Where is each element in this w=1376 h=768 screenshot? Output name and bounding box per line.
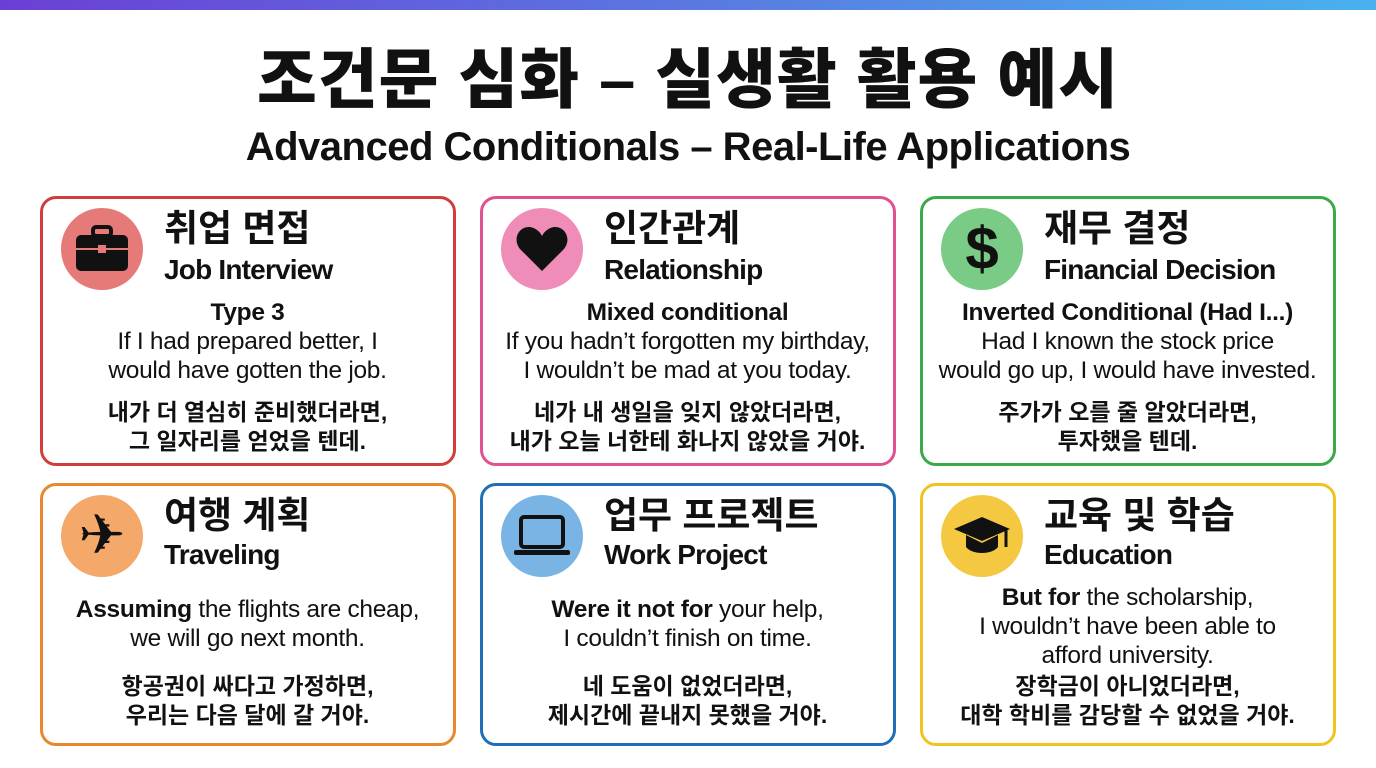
korean example: 네 도움이 없었더라면, [583, 673, 792, 699]
korean example: 네가 내 생일을 잊지 않았더라면, [534, 399, 841, 425]
english example [505, 299, 870, 384]
panel: traveling [40, 483, 456, 746]
english example: Were it not for your help, [551, 596, 824, 623]
english example [108, 299, 387, 384]
panel: education: Education [1044, 539, 1172, 570]
english example [979, 584, 1276, 669]
korean example: 장학금이 아니었더라면, [1015, 673, 1240, 699]
english example [76, 596, 419, 652]
icon: airplane [61, 495, 143, 577]
panel: financial decision: Financial Decision [1044, 254, 1275, 285]
korean example: 내가 더 열심히 준비했더라면, [108, 399, 387, 425]
korean example: 내가 오늘 너한테 화나지 않았을 거야. [510, 428, 865, 454]
icon: airplane: ✈ [79, 503, 125, 568]
english example: would go up, I would have invested. [939, 357, 1316, 384]
heading: 취업 면접 [164, 208, 310, 249]
korean example: 그 일자리를 얻었을 텐데. [129, 428, 366, 454]
icon: briefcase [61, 208, 143, 290]
panel: work project [480, 483, 896, 746]
heading: 업무 프로젝트 [604, 495, 819, 536]
english example [551, 596, 824, 652]
english example: Type 3 [210, 299, 284, 326]
korean example: 대학 학비를 감당할 수 없었을 거야. [960, 702, 1295, 728]
subtitle: Advanced Conditionals – Real-Life Applications [246, 125, 1130, 169]
english example: If you hadn’t forgotten my birthday, [505, 328, 870, 355]
icon: dollar [941, 208, 1023, 290]
english example: would have gotten the job. [108, 357, 387, 384]
english example: Had I known the stock price [981, 328, 1274, 355]
korean example: 제시간에 끝내지 못했을 거야. [548, 702, 827, 728]
korean example [548, 673, 827, 728]
panel: relationship [480, 196, 896, 466]
english example: Inverted Conditional (Had I...) [962, 299, 1293, 326]
english example: I couldn’t finish on time. [563, 625, 812, 652]
korean example: 항공권이 싸다고 가정하면, [122, 673, 373, 699]
panel: education [920, 483, 1336, 746]
english example: afford university. [1041, 642, 1214, 669]
icon: laptop [501, 495, 583, 577]
korean example [108, 399, 387, 454]
english example: we will go next month. [130, 625, 365, 652]
english example: I wouldn’t have been able to [979, 613, 1276, 640]
korean example [122, 673, 373, 728]
panel: traveling: Traveling [164, 539, 280, 570]
english example [938, 299, 1316, 384]
panel: job interview [40, 196, 456, 466]
korean example: 주가가 오를 줄 알았더라면, [998, 399, 1257, 425]
heading: 인간관계 [604, 208, 740, 249]
panel: work project: Work Project [604, 539, 767, 570]
title: 조건문 심화 – 실생활 활용 예시 [257, 43, 1119, 116]
english example: Assuming the flights are cheap, [76, 596, 419, 623]
korean example [510, 399, 865, 454]
korean example: 투자했을 텐데. [1058, 428, 1197, 454]
heading: 교육 및 학습 [1044, 495, 1235, 536]
icon: graduation cap [941, 495, 1023, 577]
english example: I wouldn’t be mad at you today. [523, 357, 852, 384]
korean example [960, 673, 1295, 728]
icon: dollar: $ [965, 215, 999, 282]
english example: Mixed conditional [587, 299, 788, 326]
english example: If I had prepared better, I [117, 328, 378, 355]
heading: 재무 결정 [1044, 208, 1190, 249]
korean example [998, 399, 1257, 454]
panel: financial decision [920, 196, 1336, 466]
panel: job interview: Job Interview [164, 254, 333, 285]
english example: But for the scholarship, [1002, 584, 1253, 611]
panel: relationship: Relationship [604, 254, 762, 285]
heading: 여행 계획 [164, 495, 310, 536]
icon: heart [501, 208, 583, 290]
korean example: 우리는 다음 달에 갈 거야. [126, 702, 369, 728]
